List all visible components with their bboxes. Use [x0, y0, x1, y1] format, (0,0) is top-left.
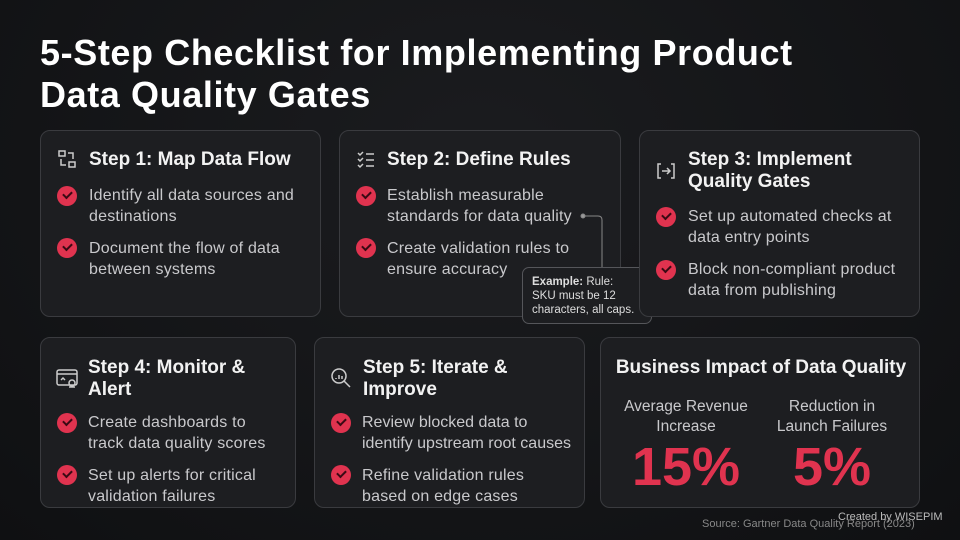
- item: [57, 413, 77, 433]
- icon: flow: [58, 150, 76, 168]
- panel: step 2: standards for data quality: [387, 208, 572, 225]
- panel: step 3: Set up automated checks at: [688, 208, 892, 225]
- heading: Step 4: Monitor &: [88, 357, 245, 378]
- stat: revenue: [624, 398, 748, 497]
- icon: monitor: [56, 369, 78, 388]
- panel: step 4: validation failures: [88, 488, 215, 505]
- callout: example: [522, 267, 652, 324]
- panel: step 1: between systems: [89, 261, 216, 278]
- title: 5-Step Checklist for Implementing Product: [40, 32, 793, 73]
- panel: step 4: Set up alerts for critical: [88, 467, 256, 484]
- heading: Step 5: Iterate &: [363, 357, 508, 378]
- panel: step 1: [40, 130, 321, 317]
- panel: step 3: data entry points: [688, 229, 810, 246]
- credit: Created by WISEPIM: [838, 511, 943, 523]
- panel: step 2: ensure accuracy: [387, 261, 507, 278]
- item: [656, 207, 676, 227]
- item: [57, 465, 77, 485]
- stat: launch failures: Reduction in: [789, 398, 875, 415]
- item: [57, 238, 77, 258]
- stat: launch failures: 5%: [793, 437, 871, 497]
- heading: Step 2: Define Rules: [387, 149, 571, 170]
- panel: step 2: [339, 130, 621, 317]
- item: [331, 465, 351, 485]
- stat: launch failures: Launch Failures: [777, 418, 887, 435]
- panel: step 2: Establish measurable: [387, 187, 544, 204]
- panel: step 5: based on edge cases: [362, 488, 518, 505]
- panel: business impact: [600, 337, 920, 508]
- panel: step 5: Review blocked data to: [362, 414, 527, 431]
- stat: revenue: Increase: [656, 418, 716, 435]
- item: [331, 413, 351, 433]
- panel: step 4: Create dashboards to: [88, 414, 246, 431]
- heading: [688, 149, 852, 192]
- heading: Step 1: Map Data Flow: [89, 149, 291, 170]
- stat: revenue: Average Revenue: [624, 398, 748, 415]
- heading: [88, 357, 245, 400]
- heading: Step 3: Implement: [688, 149, 852, 170]
- panel: step 2: Create validation rules to: [387, 240, 569, 257]
- icon: search: [331, 368, 350, 388]
- callout: example: characters, all caps.: [532, 304, 634, 316]
- callout: example connector: [580, 214, 602, 267]
- item: [356, 238, 376, 258]
- title: Data Quality Gates: [40, 74, 371, 115]
- panel: step 3: [639, 130, 920, 317]
- icon: list: [358, 152, 374, 168]
- icon: gate: [657, 163, 675, 179]
- item: [356, 186, 376, 206]
- source: Source: Gartner Data Quality Report (2023): [702, 518, 915, 530]
- item: [656, 260, 676, 280]
- panel: step 1: Document the flow of data: [89, 240, 280, 257]
- panel: step 1: Identify all data sources and: [89, 187, 294, 204]
- callout: example: Example: Rule:: [532, 276, 613, 288]
- heading: Business Impact of Data Quality: [616, 357, 906, 378]
- panel: step 5: [314, 337, 585, 508]
- stat: revenue: 15%: [632, 437, 740, 497]
- heading: Alert: [88, 379, 131, 400]
- panel: step 4: [40, 337, 296, 508]
- panel: step 3: Block non-compliant product: [688, 261, 895, 278]
- item: [57, 186, 77, 206]
- panel: step 1: destinations: [89, 208, 177, 225]
- heading: [363, 357, 508, 400]
- panel: step 4: track data quality scores: [88, 435, 266, 452]
- panel: step 5: identify upstream root causes: [362, 435, 571, 452]
- panel: step 3: data from publishing: [688, 282, 836, 299]
- heading: Improve: [363, 379, 437, 400]
- heading: Quality Gates: [688, 171, 810, 192]
- callout: example: SKU must be 12: [532, 290, 616, 302]
- stat: launch failures: [777, 398, 887, 497]
- panel: step 5: Refine validation rules: [362, 467, 524, 484]
- title: [40, 32, 793, 115]
